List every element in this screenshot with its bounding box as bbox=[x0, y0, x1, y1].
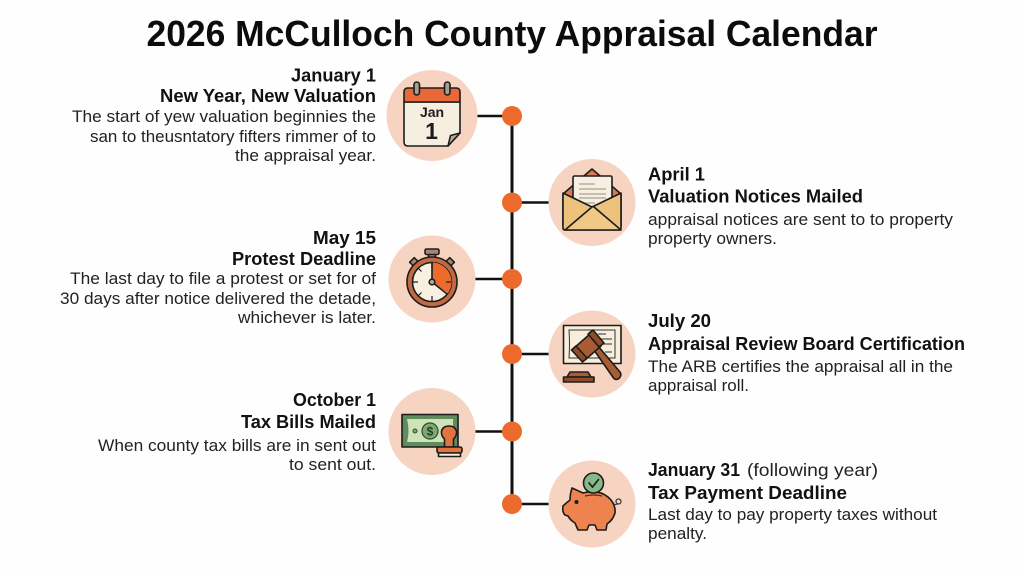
heading: Valuation Notices Mailed bbox=[648, 186, 863, 206]
node: October 1 bbox=[502, 422, 522, 442]
icon: envelope bbox=[548, 159, 636, 246]
connector: October 1 bbox=[475, 430, 512, 433]
date: October 1 bbox=[293, 390, 376, 410]
heading: Tax Bills Mailed bbox=[241, 412, 376, 432]
description: Last day to pay property taxes without bbox=[648, 506, 937, 524]
event text: October 1 bbox=[98, 390, 376, 474]
description: whichever is later. bbox=[237, 309, 376, 327]
connector: January 1 bbox=[477, 115, 512, 117]
node: April 1 bbox=[502, 192, 522, 212]
icon: calendar bbox=[386, 70, 478, 161]
description: appraisal notices are sent to to property bbox=[648, 211, 954, 229]
icon: gavel and certificate bbox=[548, 310, 636, 398]
icon: money and stamp bbox=[388, 388, 476, 475]
timeline spine bbox=[510, 116, 514, 504]
icon: calendar: 1 bbox=[425, 118, 438, 144]
date: January 1 bbox=[291, 66, 376, 86]
event text: May 15 bbox=[60, 228, 376, 327]
description: The ARB certifies the appraisal all in the bbox=[648, 358, 953, 376]
description: The last day to file a protest or set for of bbox=[70, 270, 376, 288]
heading: Tax Payment Deadline bbox=[648, 483, 847, 503]
icon: stopwatch bbox=[388, 236, 476, 322]
event text: April 1 bbox=[648, 164, 954, 248]
date qualifier: (following year) bbox=[747, 460, 878, 480]
heading: New Year, New Valuation bbox=[160, 86, 376, 106]
date: July 20 bbox=[648, 311, 711, 331]
connector: July 20 bbox=[512, 353, 549, 355]
description: san to theusntatory fifters rimmer of to bbox=[90, 128, 376, 146]
description bbox=[648, 506, 937, 543]
timeline bbox=[475, 106, 549, 514]
event text: January 31 bbox=[648, 460, 937, 543]
heading: Protest Deadline bbox=[232, 249, 376, 269]
icon: money and stamp: $ bbox=[427, 424, 434, 438]
heading: Appraisal Review Board Certification bbox=[648, 334, 965, 354]
description bbox=[98, 437, 376, 474]
date: May 15 bbox=[313, 228, 376, 248]
date: January 31 bbox=[648, 460, 740, 480]
icon: piggy bank bbox=[548, 460, 636, 548]
description: the appraisal year. bbox=[235, 147, 376, 165]
event text: January 1 bbox=[72, 66, 376, 165]
description bbox=[648, 358, 953, 395]
connector: May 15 bbox=[475, 278, 512, 280]
node: January 1 bbox=[502, 106, 522, 126]
description: The start of yew valuation beginnies the bbox=[72, 108, 376, 126]
description bbox=[60, 270, 376, 327]
description: property owners. bbox=[648, 230, 777, 248]
description: appraisal roll. bbox=[648, 377, 749, 395]
node: May 15 bbox=[502, 269, 522, 289]
description bbox=[648, 211, 954, 248]
date: April 1 bbox=[648, 164, 705, 184]
description bbox=[72, 108, 376, 165]
node: January 31 bbox=[502, 494, 522, 514]
connector: April 1 bbox=[512, 201, 549, 204]
title: 2026 McCulloch County Appraisal Calendar bbox=[146, 13, 878, 54]
description: to sent out. bbox=[289, 456, 376, 474]
icon: calendar: Jan bbox=[420, 104, 444, 120]
description: penalty. bbox=[648, 525, 707, 543]
node: July 20 bbox=[502, 344, 522, 364]
description: When county tax bills are in sent out bbox=[98, 437, 376, 455]
event text: July 20 bbox=[648, 311, 965, 395]
connector: January 31 bbox=[512, 503, 549, 505]
description: 30 days after notice delivered the detade, bbox=[60, 290, 376, 308]
